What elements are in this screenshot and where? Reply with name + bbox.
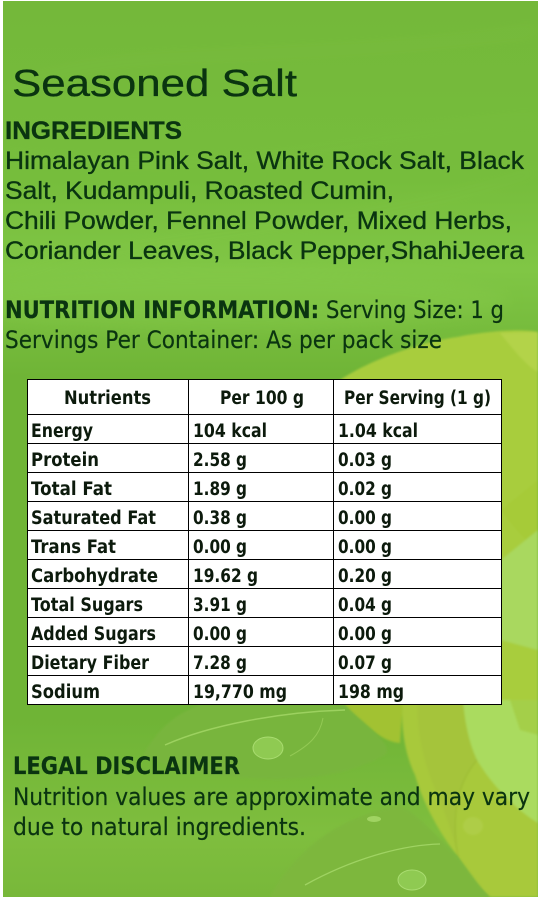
title: Seasoned Salt xyxy=(12,63,298,105)
row: protein: 0.03 g xyxy=(338,450,392,471)
row: carbohydrate xyxy=(31,566,392,587)
nutrition heading: NUTRITION INFORMATION: xyxy=(5,296,319,324)
row: protein: Protein xyxy=(31,450,99,471)
row: carbohydrate: 0.20 g xyxy=(338,566,392,587)
row: added sugars: Added Sugars xyxy=(31,624,156,645)
ingredients text: Coriander Leaves, Black Pepper,ShahiJeera xyxy=(5,237,524,265)
row: energy xyxy=(31,421,418,442)
nutrition table xyxy=(27,380,502,704)
row: total fat: 1.89 g xyxy=(193,479,247,500)
row: trans fat: Trans Fat xyxy=(31,537,116,558)
row: total fat xyxy=(31,479,392,500)
row: added sugars: 0.00 g xyxy=(193,624,247,645)
table header: Nutrients xyxy=(64,388,151,409)
ingredients text xyxy=(5,147,525,265)
disclaimer text xyxy=(13,783,530,841)
row: total sugars: 0.04 g xyxy=(338,595,392,616)
row: saturated fat: 0.00 g xyxy=(338,508,392,529)
ingredients text: Himalayan Pink Salt, White Rock Salt, Black xyxy=(5,147,525,175)
row: carbohydrate: Carbohydrate xyxy=(31,566,158,587)
row: dietary fiber: 7.28 g xyxy=(193,653,247,674)
row: sodium xyxy=(31,682,404,703)
row: sodium: Sodium xyxy=(31,682,100,703)
row: total fat: 0.02 g xyxy=(338,479,392,500)
row: trans fat: 0.00 g xyxy=(338,537,392,558)
row: dietary fiber xyxy=(31,653,392,674)
table header: Per Serving (1 g) xyxy=(344,388,491,409)
servings per container: Servings Per Container: As per pack size xyxy=(5,326,442,354)
row: energy: 1.04 kcal xyxy=(338,421,418,442)
row: trans fat xyxy=(31,537,392,558)
row: total fat: Total Fat xyxy=(31,479,112,500)
row: added sugars: 0.00 g xyxy=(338,624,392,645)
ingredients text: Salt, Kudampuli, Roasted Cumin, xyxy=(5,177,394,205)
nutrition information xyxy=(5,296,504,354)
table header: Per 100 g xyxy=(220,388,304,409)
row: saturated fat: Saturated Fat xyxy=(31,508,156,529)
disclaimer heading: LEGAL DISCLAIMER xyxy=(13,752,240,780)
disclaimer text: due to natural ingredients. xyxy=(13,813,306,841)
row: dietary fiber: 0.07 g xyxy=(338,653,392,674)
row: trans fat: 0.00 g xyxy=(193,537,247,558)
ingredients text: Chili Powder, Fennel Powder, Mixed Herbs, xyxy=(5,207,512,235)
serving size: Serving Size: 1 g xyxy=(326,296,504,324)
row: added sugars xyxy=(31,624,392,645)
row: dietary fiber: Dietary Fiber xyxy=(31,653,150,674)
legal disclaimer xyxy=(13,752,530,841)
row: total sugars: Total Sugars xyxy=(31,595,143,616)
row: saturated fat xyxy=(31,508,392,529)
ingredients heading: INGREDIENTS xyxy=(5,117,182,145)
ingredients block xyxy=(5,117,525,265)
row: protein: 2.58 g xyxy=(193,450,247,471)
fruit illustration xyxy=(340,330,538,897)
row: protein xyxy=(31,450,392,471)
row: sodium: 198 mg xyxy=(338,682,404,703)
row: energy: 104 kcal xyxy=(193,421,267,442)
row: total sugars xyxy=(31,595,392,616)
leaf illustration xyxy=(143,705,490,897)
row: sodium: 19,770 mg xyxy=(193,682,287,703)
row: energy: Energy xyxy=(31,421,93,442)
table header xyxy=(64,388,491,409)
row: total sugars: 3.91 g xyxy=(193,595,247,616)
row: carbohydrate: 19.62 g xyxy=(193,566,258,587)
row: saturated fat: 0.38 g xyxy=(193,508,247,529)
